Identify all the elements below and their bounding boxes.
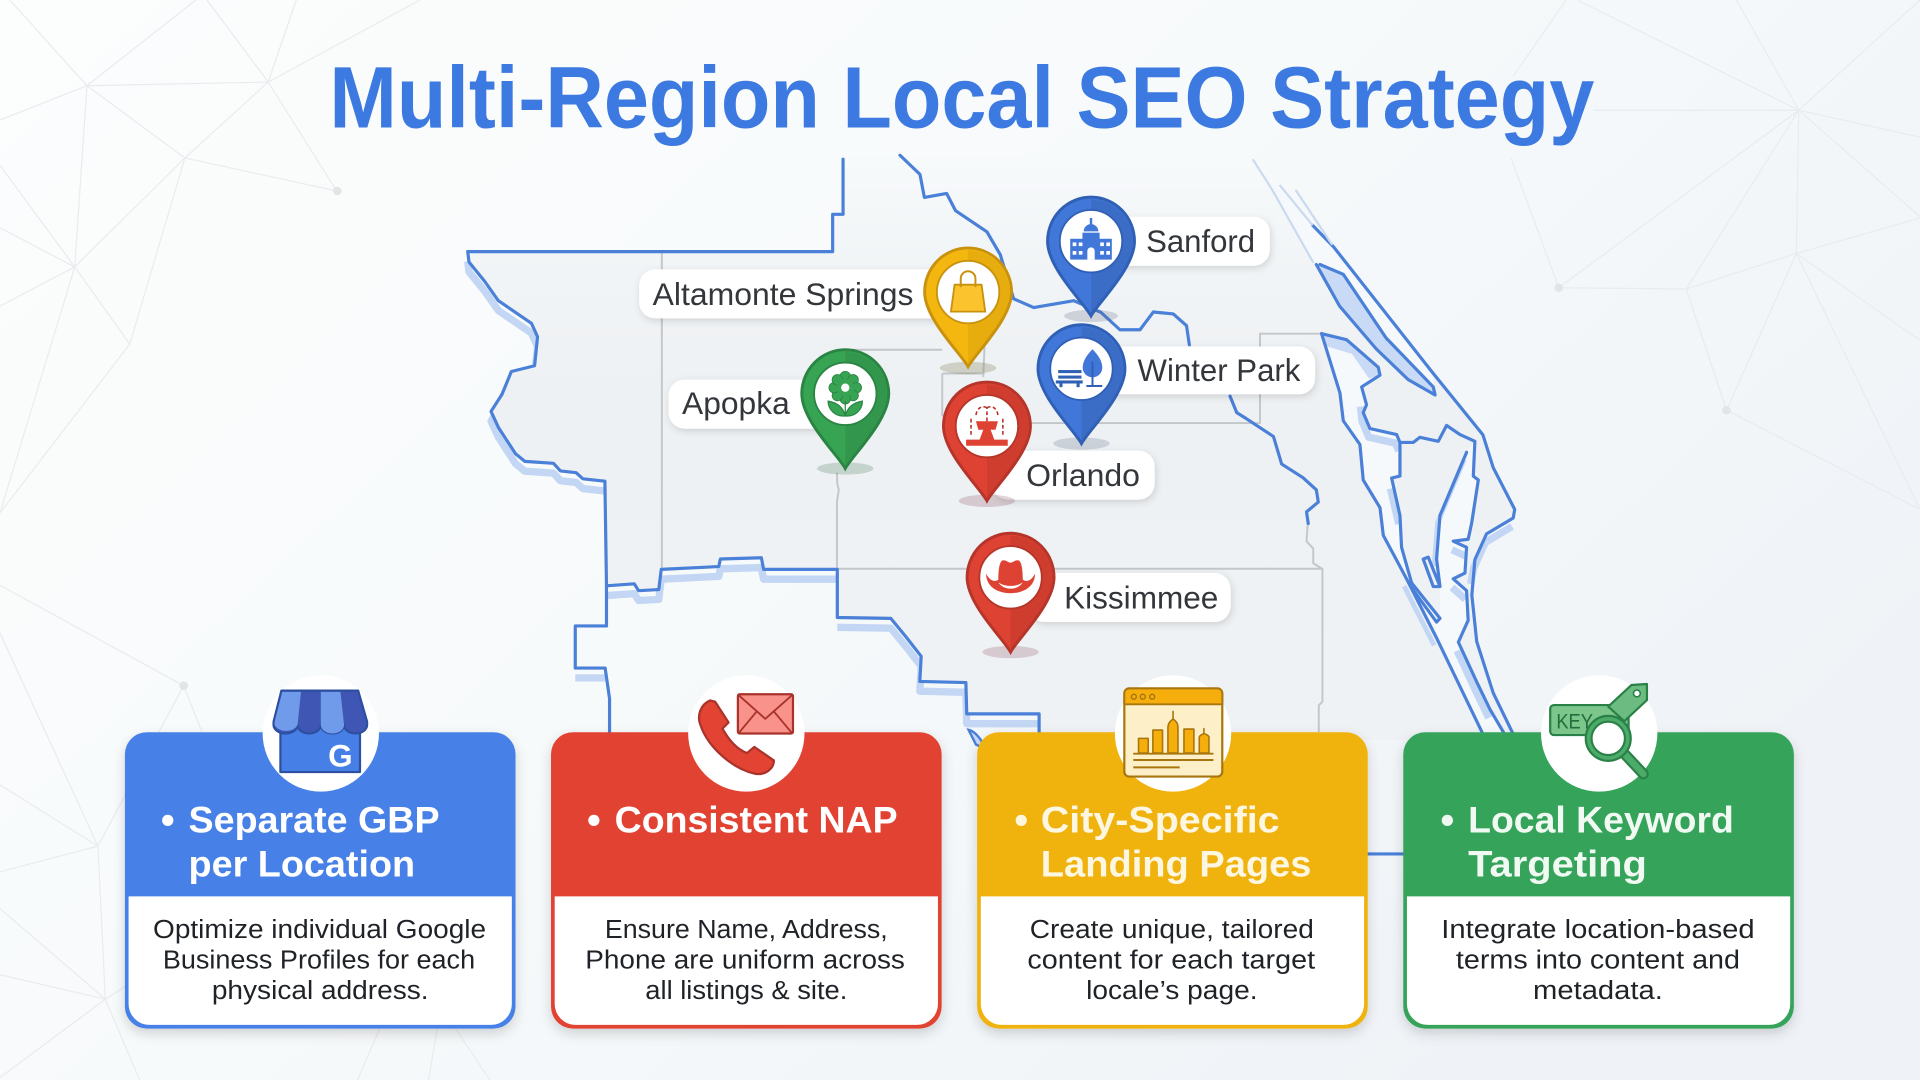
pin: Winter Park bench and tree [1038,325,1125,450]
icon: storefront: G [328,738,353,774]
heading: City-Specific [1041,800,1280,841]
panel: Separate GBP per Location [125,675,516,1029]
label: Kissimmee: Kissimmee [1064,580,1218,616]
description: physical address. [212,975,429,1005]
heading: per Location [189,844,415,885]
label: Winter Park: Winter Park [1138,352,1300,388]
card body [977,732,1368,1029]
panel: Local Keyword Targeting [1403,675,1794,1029]
heading: Targeting [1468,844,1647,885]
pin: Orlando fountain [943,382,1030,507]
heading [1016,800,1311,885]
description [1027,914,1316,1005]
description: Phone are uniform across [585,945,905,975]
heading: Local Keyword [1468,800,1734,841]
icon circle [688,675,804,792]
icon: keyword tag and magnifier: KEY [1556,711,1593,734]
card body [1403,732,1794,1029]
icon circle [1115,675,1231,792]
pin: Apopka flower [802,350,889,475]
description: Business Profiles for each [163,945,475,975]
heading: Consistent NAP [615,800,898,841]
description: terms into content and [1456,945,1740,975]
description [153,914,486,1005]
description: locale’s page. [1086,975,1258,1005]
label: Orlando: Orlando [1026,457,1140,493]
title: Multi-Region Local SEO Strategy [329,49,1594,146]
description [585,914,905,1005]
pin: Altamonte Springs shopping bag [925,248,1012,374]
label: Apopka [669,380,833,429]
label: Winter Park [1078,347,1315,394]
card body [125,732,516,1029]
icon circle [1541,675,1657,792]
description: Integrate location-based [1441,914,1755,944]
heading: Separate GBP [189,800,440,841]
icon: phone and envelope [699,694,793,774]
panel: Consistent NAP [551,675,942,1029]
label: Altamonte Springs: Altamonte Springs [653,276,913,312]
label: Sanford: Sanford [1146,223,1255,259]
description: all listings & site. [645,975,847,1005]
description: Create unique, tailored [1030,914,1314,944]
label: Altamonte Springs [639,269,980,318]
icon: city landing page [1124,688,1222,777]
heading [1442,800,1734,885]
description: Ensure Name, Address, [605,914,888,944]
pin: Kissimmee cowboy hat [967,533,1054,658]
label: Apopka: Apopka [682,385,790,421]
card body [551,732,942,1029]
description [1441,914,1755,1005]
description: metadata. [1533,975,1663,1005]
description: Optimize individual Google [153,914,486,944]
label: Sanford [1078,217,1270,266]
label: Orlando [992,451,1155,500]
heading [162,800,440,885]
description: content for each target [1027,945,1316,975]
icon: storefront [274,691,367,774]
label: Kissimmee [1029,573,1231,622]
pin: Sanford historic building [1048,197,1134,322]
map of Central Florida regions [468,155,1515,854]
heading: Landing Pages [1041,844,1311,885]
panel: City-Specific Landing Pages [977,675,1368,1029]
icon: keyword tag and magnifier [1550,684,1647,774]
icon circle [263,675,379,792]
